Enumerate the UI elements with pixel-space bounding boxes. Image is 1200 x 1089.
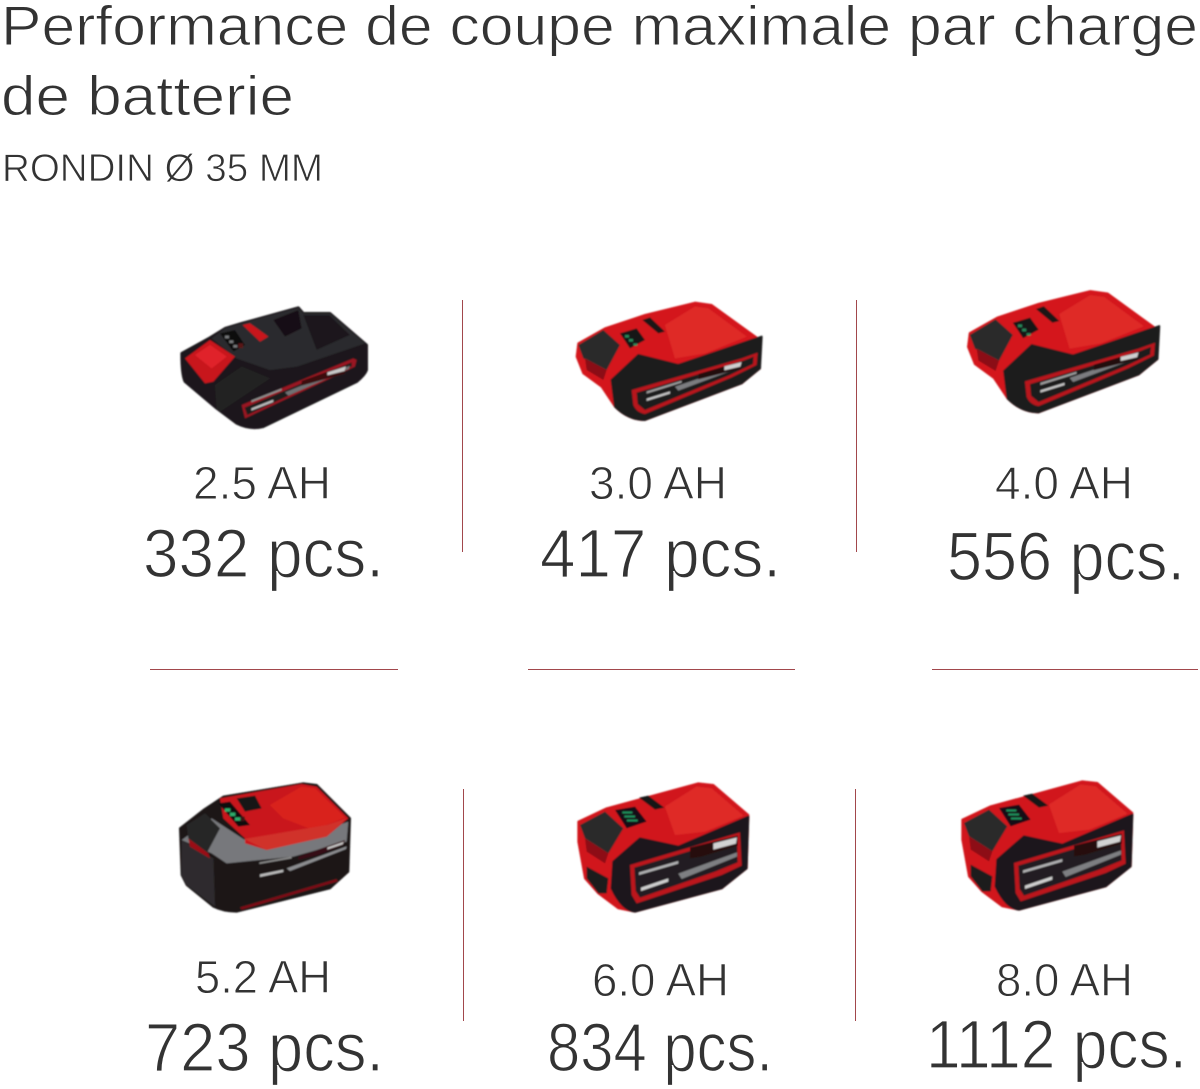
icon: 6.0 Ah battery xyxy=(578,783,748,912)
label: 6.0 AH: 6.0 AH xyxy=(592,954,729,1006)
panel: 3.0 Ah xyxy=(540,303,781,592)
label: 8.0 AH: 8.0 AH xyxy=(996,954,1133,1006)
title xyxy=(1,0,1198,127)
title: de batterie xyxy=(1,64,294,127)
panel: 6.0 Ah xyxy=(547,783,773,1086)
value: 417 pcs.: 417 pcs. xyxy=(540,515,781,592)
icon: 5.2 Ah battery xyxy=(180,783,350,912)
panel: 5.2 Ah xyxy=(145,783,384,1086)
value: 332 pcs.: 332 pcs. xyxy=(143,515,384,592)
icon: 2.5 Ah battery xyxy=(182,308,367,428)
icon: 3.0 Ah battery xyxy=(577,303,762,420)
label: 5.2 AH: 5.2 AH xyxy=(195,951,331,1003)
subtitle: RONDIN Ø 35 MM xyxy=(2,147,323,190)
label: 4.0 AH: 4.0 AH xyxy=(995,457,1133,509)
value: 723 pcs.: 723 pcs. xyxy=(145,1009,384,1086)
label: 3.0 AH: 3.0 AH xyxy=(589,457,727,509)
panel: 8.0 Ah xyxy=(926,781,1187,1083)
label: 2.5 AH: 2.5 AH xyxy=(193,457,331,509)
icon: 4.0 Ah battery xyxy=(968,291,1159,412)
panel: 2.5 Ah xyxy=(143,308,384,592)
icon: 8.0 Ah battery xyxy=(962,781,1132,910)
value: 834 pcs.: 834 pcs. xyxy=(547,1009,773,1086)
panel: 4.0 Ah xyxy=(947,291,1185,595)
